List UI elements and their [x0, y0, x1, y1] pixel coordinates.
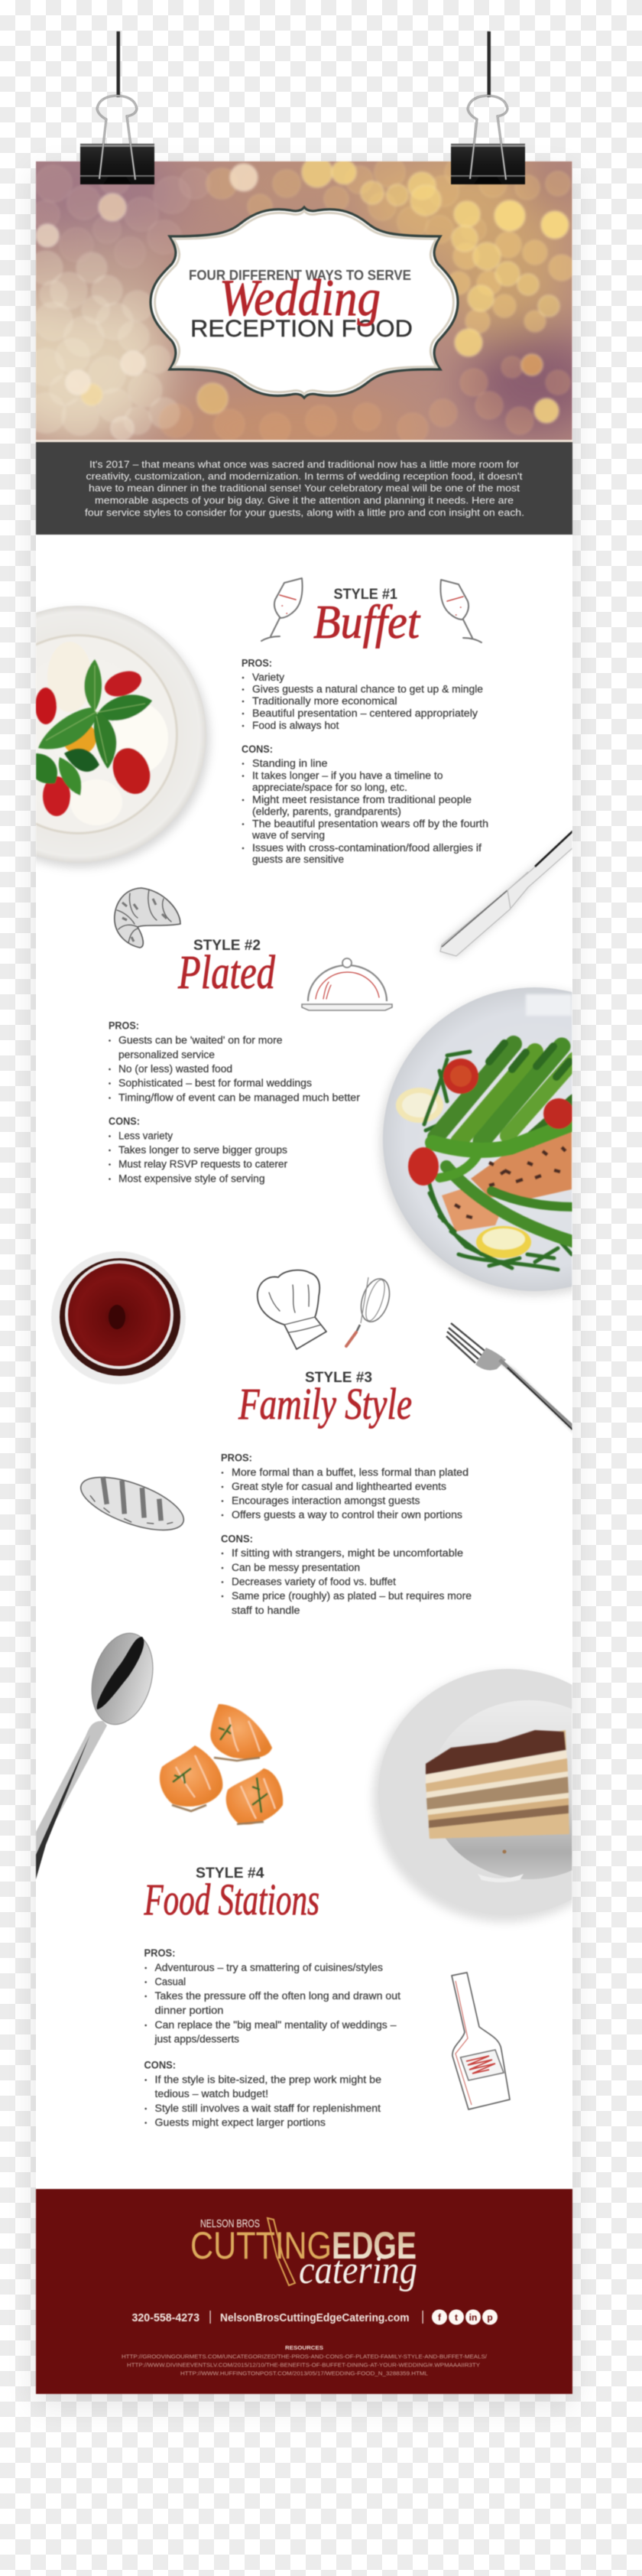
photo: red wine glass from above [51, 1251, 186, 1384]
hanging clip left [80, 31, 154, 184]
social icons: in [469, 2312, 477, 2323]
resources [122, 2344, 488, 2377]
logo: cutting edge catering: NELSON BROS [200, 2217, 260, 2230]
plate photo: asparagus and salmon [377, 987, 573, 1299]
plate photo: layered cake [370, 1669, 572, 1925]
text: buffet pros and cons: Beautiful presentation – centered appropriately [252, 707, 478, 719]
resources: RESOURCES [285, 2344, 323, 2351]
intro band: memorable aspects of your big day. Give it the attention and planning it needs. Here are [95, 494, 514, 506]
text: plated pros and cons: Takes longer to serve bigger groups [118, 1144, 287, 1156]
text: food stations pros and cons: Casual [154, 1976, 186, 1987]
hero title frame [151, 207, 458, 398]
text: family style pros and cons: More formal than a buffet, less formal than plated [232, 1467, 469, 1478]
text: family style pros and cons: Encourages interaction amongst guests [232, 1495, 420, 1507]
resources: HTTP://WWW.HUFFINGTONPOST.COM/2013/05/17/WEDDING-FOOD_N_3288359.HTML [180, 2369, 428, 2377]
footer band [36, 2189, 572, 2394]
hanging clip right [451, 31, 525, 184]
text: plated pros and cons: No (or less) wasted food [118, 1063, 232, 1075]
text: buffet pros and cons: The beautiful presentation wears off by the fourth [252, 818, 488, 829]
icon: chef hat [258, 1270, 326, 1349]
social icons: f [438, 2312, 442, 2323]
heading: style 4: STYLE #4 [196, 1865, 264, 1882]
text: plated pros and cons: Must relay RSVP requests to caterer [118, 1158, 288, 1170]
logo: cutting edge catering: EDGE [332, 2224, 417, 2267]
text: food stations pros and cons: CONS: [144, 2059, 176, 2071]
icon: bread loaf [74, 1466, 190, 1541]
heading: style 3: STYLE #3 [305, 1369, 372, 1386]
intro band: four service styles to consider for your guests, along with a little pro and con insight on each. [85, 506, 524, 519]
text: buffet pros and cons: (elderly, parents, grandparents) [252, 806, 401, 817]
text: plated pros and cons: Most expensive style of serving [118, 1173, 264, 1184]
heading: style 2: Plated [177, 947, 276, 999]
text: buffet pros and cons: appreciate/space for so long, etc. [252, 782, 407, 793]
contact line: NelsonBrosCuttingEdgeCatering.com [220, 2312, 410, 2324]
resources: HTTP://GROOVINGOURMETS.COM/UNCATEGORIZED/THE-PROS-AND-CONS-OF-PLATED-FAMILY-STYLE-AND-BUFFET-MEALS/ [122, 2353, 488, 2360]
contact line [131, 2311, 423, 2324]
text: buffet pros and cons: Might meet resistance from traditional people [252, 794, 472, 805]
text: food stations pros and cons: Takes the pressure off the often long and drawn out [154, 1990, 400, 2002]
text: family style pros and cons: PROS: [221, 1452, 252, 1464]
text: food stations pros and cons [144, 1947, 400, 2128]
heading: style 1: STYLE #1 [333, 586, 397, 603]
photo: spoon [36, 1626, 162, 1879]
heading: style 1: Buffet [313, 597, 421, 649]
logo: cutting edge catering [190, 2217, 417, 2292]
photo: salmon bites [160, 1704, 283, 1825]
logo: cutting edge catering: CUTTING [190, 2224, 332, 2267]
text: family style pros and cons: Decreases variety of food vs. buffet [232, 1576, 396, 1588]
heading: style 3: Family Style [238, 1379, 412, 1429]
text: buffet pros and cons: Standing in line [252, 757, 327, 769]
heading: style 2 [177, 937, 276, 999]
poster sheet with soft shadow [36, 161, 572, 2394]
text: food stations pros and cons: dinner portion [154, 2005, 223, 2016]
heading: style 4 [144, 1865, 319, 1924]
text: buffet pros and cons: PROS: [242, 658, 272, 668]
text: food stations pros and cons: Adventurous – try a smattering of cuisines/styles [154, 1962, 383, 1973]
intro band: creativity, customization, and modernization. In terms of wedding reception food, it doesn't [86, 470, 523, 482]
photo: fork [446, 1323, 575, 1432]
resources: HTTP://WWW.DIVINEEVENTSLV.COM/2015/12/10/THE-BENEFITS-OF-BUFFET-DINING-AT-YOUR-WEDDING/#.WPMAAAIIR3TY [127, 2362, 480, 2368]
text: buffet pros and cons: CONS: [242, 743, 273, 755]
text: buffet pros and cons: Food is always hot [252, 720, 339, 731]
text: family style pros and cons: Offers guests a way to control their own portions [232, 1509, 462, 1521]
intro band [36, 442, 572, 535]
text: buffet pros and cons: Variety [252, 672, 284, 683]
icon: champagne glass right [440, 580, 481, 642]
social icons [432, 2310, 498, 2325]
infographic artwork [35, 31, 573, 2395]
text: buffet pros and cons: Traditionally more economical [252, 695, 397, 707]
text: family style pros and cons: Great style for casual and lighthearted events [232, 1481, 446, 1492]
text: food stations pros and cons: tedious – watch budget! [154, 2088, 268, 2100]
text: family style pros and cons: Can be messy presentation [232, 1562, 360, 1573]
text: family style pros and cons: CONS: [221, 1533, 253, 1545]
social icons: t [455, 2312, 458, 2323]
icon: cloche [302, 958, 392, 1010]
icon: bottle [452, 1973, 510, 2109]
text: buffet pros and cons: Gives guests a natural chance to get up & mingle [252, 684, 483, 694]
text: food stations pros and cons: just apps/desserts [154, 2033, 239, 2045]
hero panel: bokeh background [35, 161, 573, 441]
intro band: have to mean dinner in the traditional sense! Your celebratory meal will be one of the most [89, 482, 520, 494]
plate photo: caprese [35, 606, 213, 871]
text: food stations pros and cons: Can replace the "big meal" mentality of weddings – [154, 2019, 397, 2031]
text: plated pros and cons: Sophisticated – best for formal weddings [118, 1077, 312, 1089]
text: food stations pros and cons: PROS: [144, 1947, 176, 1959]
text: buffet pros and cons [242, 658, 488, 865]
text: plated pros and cons: Less variety [118, 1130, 173, 1141]
hero separator [36, 440, 572, 442]
social icons: p [487, 2312, 493, 2323]
text: family style pros and cons: Same price (roughly) as plated – but requires more [232, 1590, 472, 1602]
text: family style pros and cons: If sitting with strangers, might be uncomfortable [232, 1547, 463, 1559]
icon: croissant [115, 888, 180, 948]
photo: knife [440, 831, 575, 956]
text: plated pros and cons: Timing/flow of event can be managed much better [118, 1092, 361, 1103]
heading: style 2: STYLE #2 [193, 937, 261, 954]
text: family style pros and cons: staff to handle [232, 1605, 300, 1616]
text: family style pros and cons [221, 1452, 472, 1616]
text: plated pros and cons: personalized service [118, 1049, 215, 1060]
text: buffet pros and cons: It takes longer – if you have a timeline to [252, 769, 443, 782]
text: buffet pros and cons: guests are sensitive [252, 854, 344, 865]
text: plated pros and cons: PROS: [109, 1020, 139, 1031]
title: RECEPTION FOOD [190, 314, 413, 342]
text: buffet pros and cons: Issues with cross-contamination/food allergies if [252, 842, 481, 854]
heading: style 4: Food Stations [144, 1875, 319, 1924]
text: plated pros and cons [109, 1020, 361, 1184]
intro band: It's 2017 – that means what once was sacred and traditional now has a little more room for [89, 459, 520, 470]
logo: cutting edge catering: catering [299, 2249, 417, 2292]
heading: style 3 [238, 1369, 412, 1429]
text: plated pros and cons: CONS: [109, 1115, 140, 1127]
title [189, 268, 413, 342]
contact line: 320-558-4273 [131, 2312, 199, 2324]
text: food stations pros and cons: Style still involves a wait staff for replenishment [154, 2103, 381, 2114]
text: buffet pros and cons: wave of serving [251, 829, 325, 841]
text: food stations pros and cons: Guests might expect larger portions [154, 2117, 326, 2128]
title: Wedding [219, 268, 381, 327]
text: plated pros and cons: Guests can be 'waited' on for more [118, 1034, 283, 1046]
title: FOUR DIFFERENT WAYS TO SERVE [189, 268, 411, 283]
text: food stations pros and cons: If the style is bite-sized, the prep work might be [154, 2074, 381, 2085]
icon: whisk [346, 1275, 394, 1346]
icon: champagne glass left [261, 578, 303, 641]
